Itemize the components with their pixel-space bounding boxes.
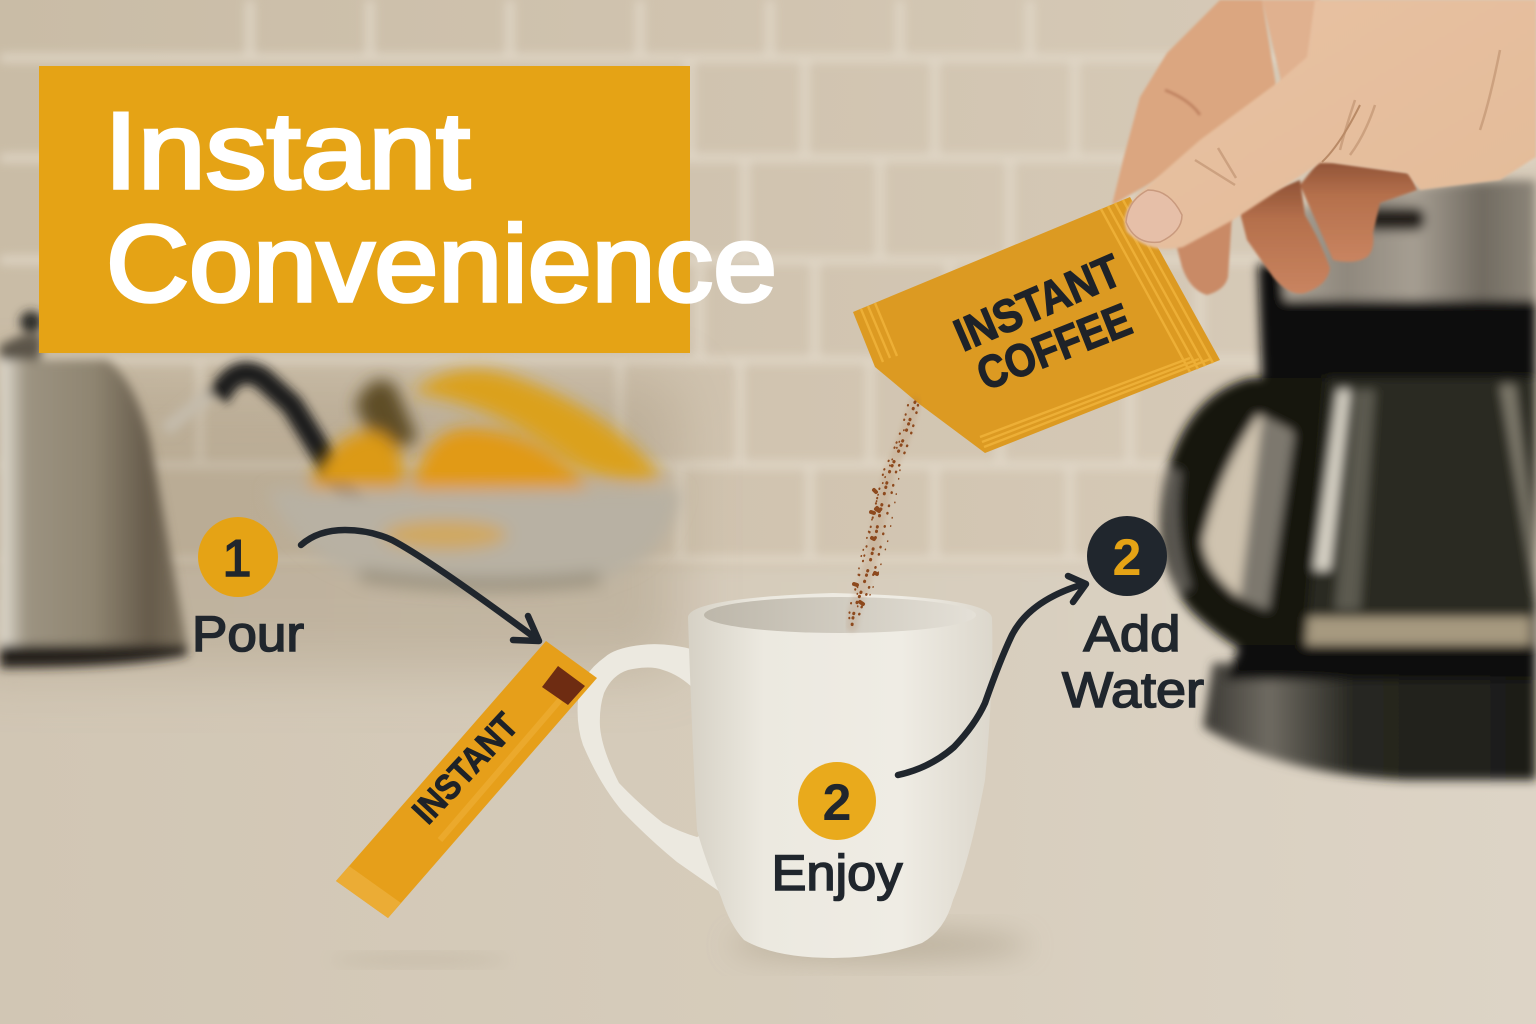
mug	[578, 593, 1030, 959]
badge 1: 1	[223, 530, 251, 588]
arrow: pour to stick	[301, 530, 539, 641]
base	[1203, 663, 1536, 780]
kettle	[0, 311, 362, 668]
badge 2 dark: 2	[1113, 529, 1141, 587]
badge 1	[198, 517, 278, 597]
label add water: Add	[1084, 606, 1180, 662]
hand: fingers behind sachet	[1112, 0, 1417, 295]
fruit bowl with bananas	[268, 369, 682, 584]
background: counter top	[0, 380, 1536, 1024]
sachet label: COFFEE	[970, 293, 1138, 400]
carafe	[1299, 378, 1536, 645]
sachet label: INSTANT	[946, 244, 1129, 361]
falling coffee powder	[849, 402, 918, 626]
title banner	[39, 66, 777, 353]
title text: Instant	[104, 90, 470, 212]
label add water: Water	[1062, 662, 1204, 718]
mug handle	[578, 644, 720, 892]
title text	[104, 90, 777, 325]
badge 2 dark	[1087, 516, 1167, 596]
label pour: Pour	[192, 606, 304, 662]
carafe handle	[1161, 378, 1327, 655]
step 3: enjoy	[772, 762, 902, 901]
label enjoy: Enjoy	[772, 845, 902, 901]
badge 2 yellow: 2	[823, 774, 851, 832]
background: tiled wall	[0, 0, 1536, 600]
stick label: INSTANT	[404, 705, 526, 831]
thumbnail	[1126, 190, 1182, 242]
hand: thumb and back of hand	[1125, 0, 1536, 249]
sachet label	[946, 244, 1138, 400]
banner background	[39, 66, 690, 353]
mug opening	[704, 597, 976, 633]
step 1: pour	[192, 517, 304, 662]
title text: Convenience	[106, 203, 777, 325]
coffee maker	[1161, 180, 1536, 780]
instant stick packet	[330, 641, 597, 967]
mug body	[688, 593, 992, 958]
step 2: add water	[1062, 516, 1204, 718]
reservoir	[1265, 180, 1536, 320]
label add water	[1062, 606, 1204, 718]
instant coffee sachet	[853, 197, 1220, 453]
arrow: enjoy to add water	[898, 576, 1086, 775]
